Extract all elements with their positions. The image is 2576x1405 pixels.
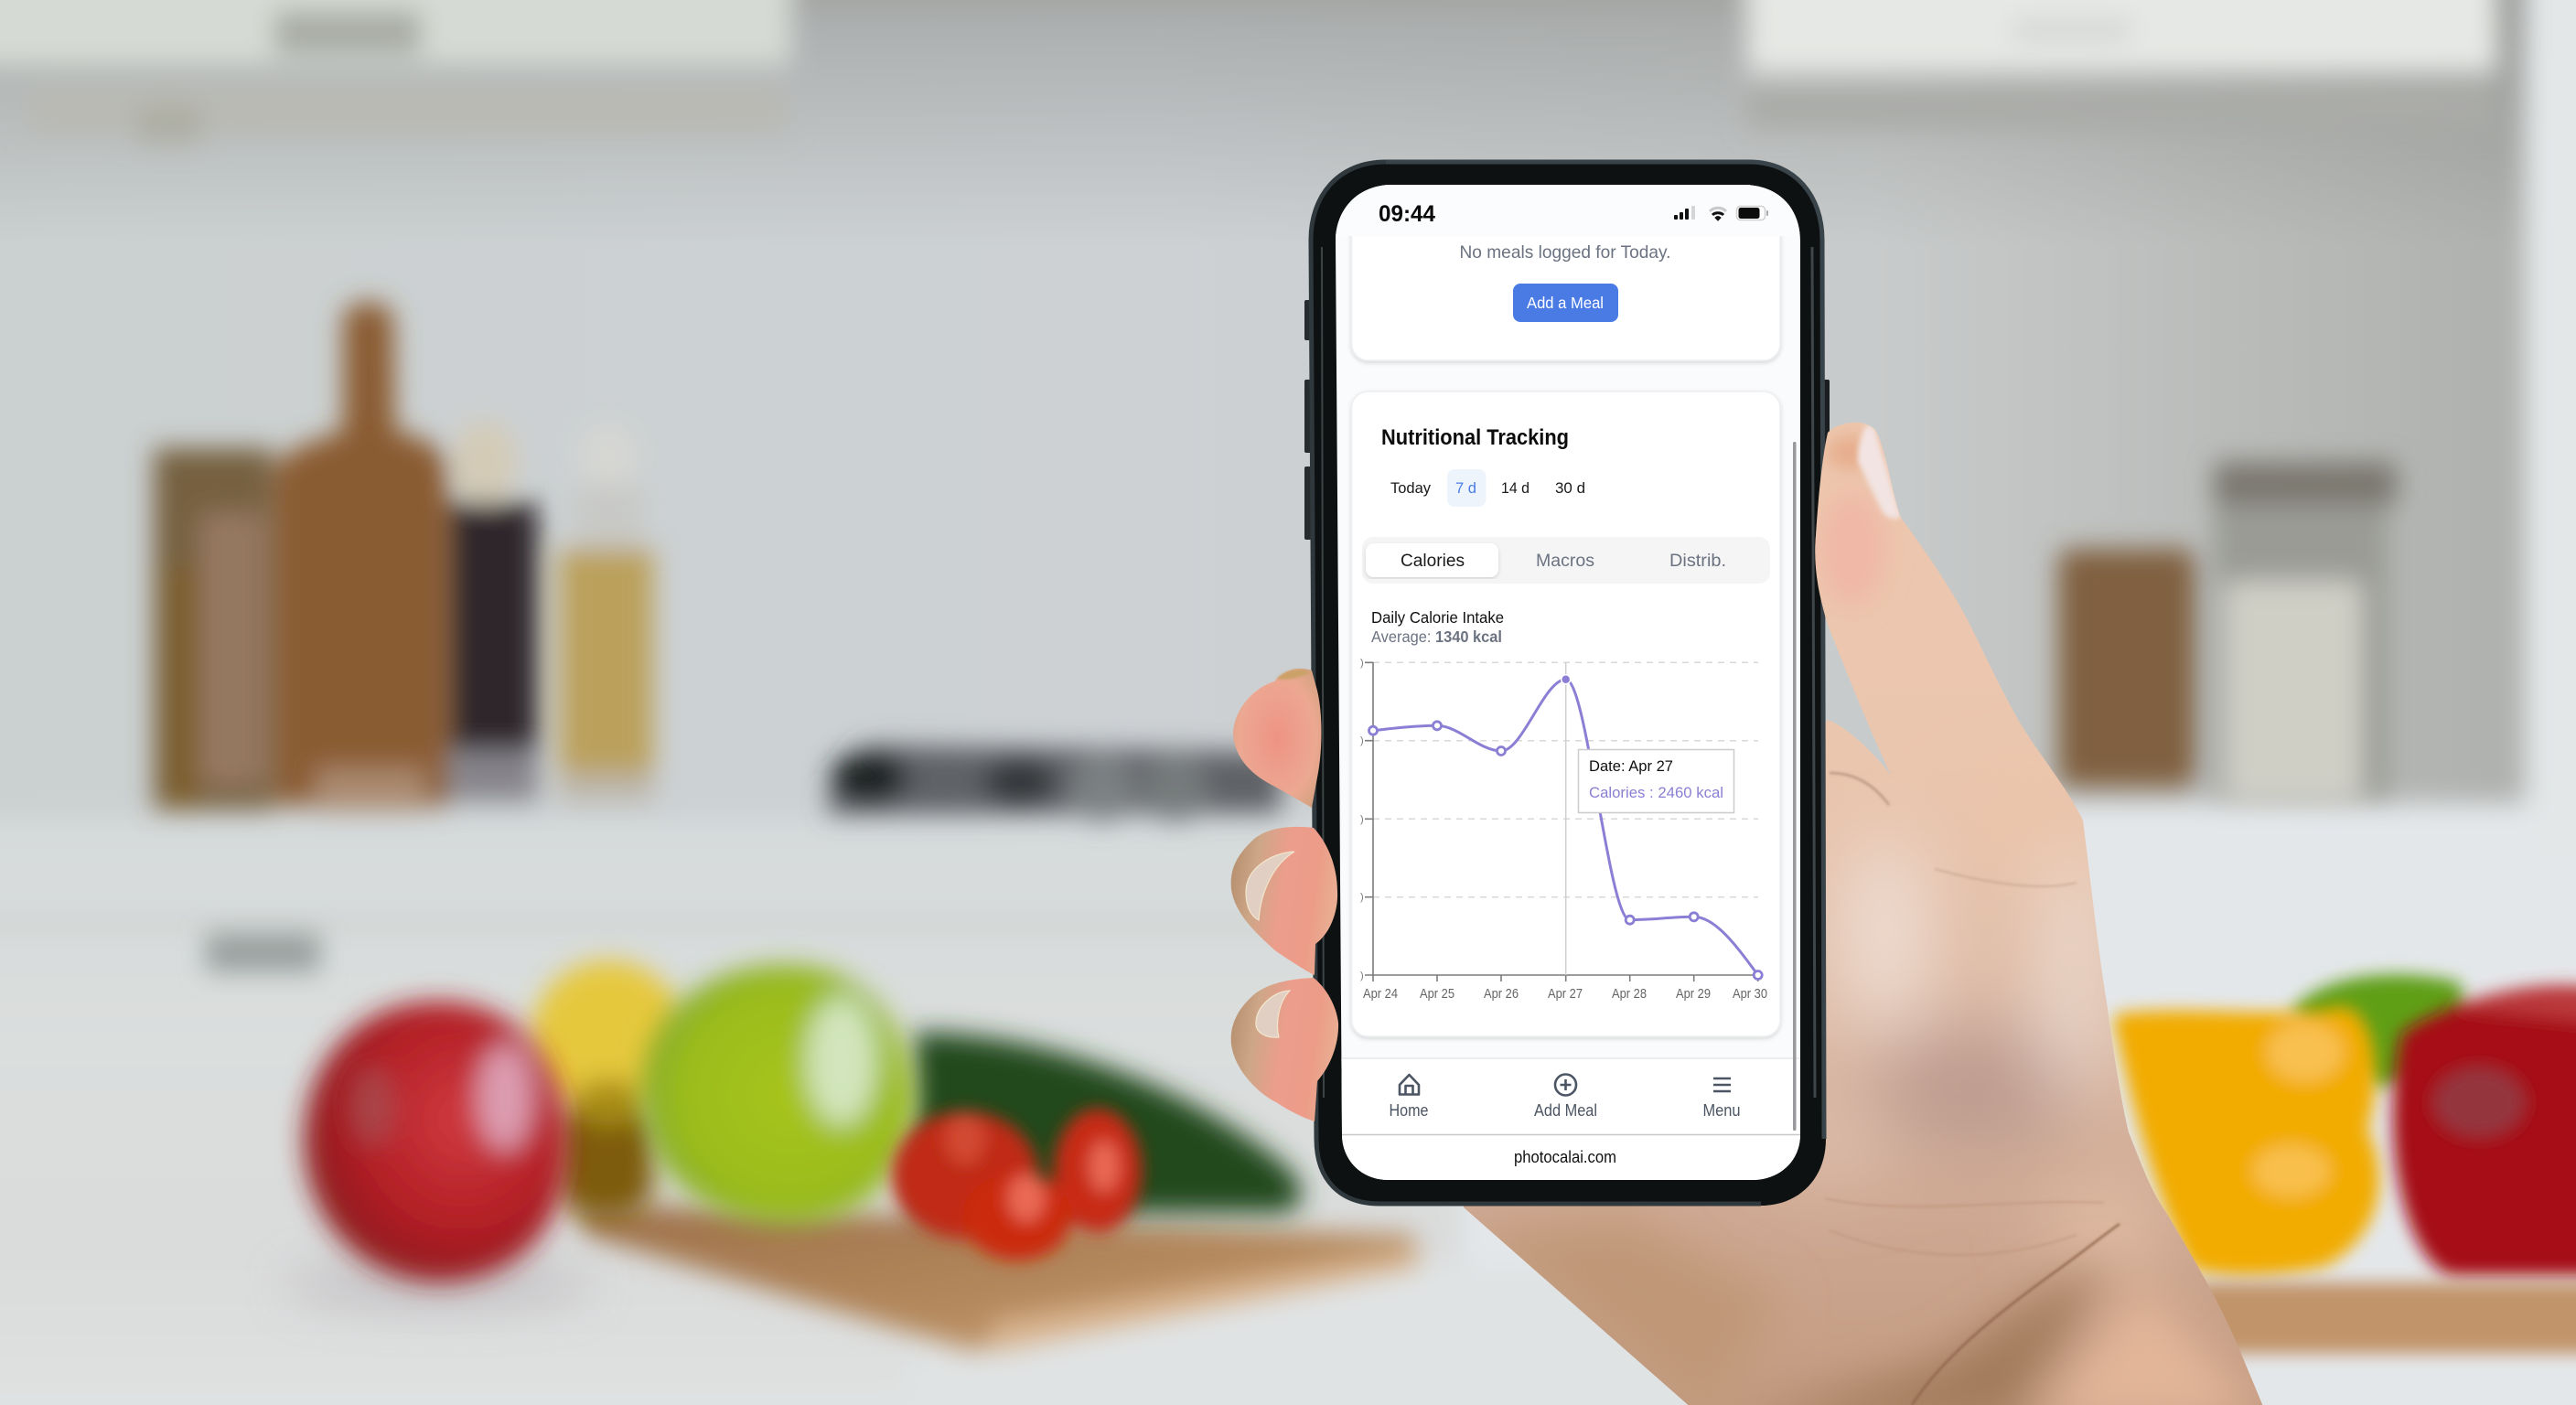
x labels: Apr 25 (1420, 986, 1454, 1002)
button: add a meal: Add a Meal (1527, 294, 1604, 312)
nail (1246, 852, 1294, 920)
segmented control: Distrib. (1669, 552, 1726, 571)
icon: home (1400, 1075, 1419, 1094)
phone body (1304, 160, 1830, 1206)
lemon (531, 960, 686, 1217)
x labels (1363, 986, 1767, 1002)
icon: add (1555, 1074, 1576, 1096)
y labels (1360, 658, 1364, 981)
tomatoes (892, 1109, 1142, 1260)
shade below cabinets (0, 0, 2576, 247)
green apple (642, 965, 913, 1224)
x labels: Apr 24 (1363, 986, 1398, 1002)
url bar: photocalai.com (1514, 1147, 1616, 1166)
thumb pad (1815, 499, 1882, 598)
tooltip: Date: Apr 27 (1589, 757, 1673, 775)
segmented control (1362, 537, 1770, 584)
right shelf items: brown jar and white canister (2058, 462, 2397, 800)
button: add a meal (1513, 284, 1618, 322)
bottom navigation (1331, 1058, 1807, 1135)
status bar (1331, 183, 1807, 236)
middle finger (1231, 827, 1337, 975)
icon: signal (1674, 206, 1695, 220)
y labels: ) (1360, 971, 1364, 981)
card: meals (1352, 165, 1780, 360)
icon: battery (1736, 207, 1768, 220)
y labels: ) (1360, 735, 1364, 746)
empty message: No meals logged for Today. (1460, 242, 1670, 263)
data points (1368, 675, 1762, 979)
segmented control: Macros (1536, 552, 1594, 571)
counter top (0, 803, 2576, 1405)
icon: wifi (1710, 208, 1726, 220)
ring finger (1231, 978, 1338, 1121)
thumb overlapping phone edge (1445, 402, 2287, 1405)
outer frame (1309, 160, 1826, 1206)
card: nutritional tracking (1352, 391, 1780, 1036)
cutting board right (2195, 1282, 2576, 1354)
thumb nail (1858, 424, 1901, 519)
cutting board left (576, 1203, 1418, 1352)
clock: 09:44 (1379, 201, 1435, 227)
frame highlights (1311, 162, 1824, 1204)
shadow under apple (284, 1265, 595, 1305)
x labels: Apr 28 (1612, 986, 1647, 1002)
label: menu: Menu (1703, 1101, 1740, 1120)
segmented control: Calories (1401, 552, 1465, 571)
x labels: Apr 27 (1548, 986, 1583, 1002)
period tabs (1390, 469, 1585, 507)
stove (828, 745, 1281, 821)
left shelf items: jar, cutting board, bottles (154, 302, 653, 810)
small blurred item on counter (206, 933, 320, 971)
phone screen (1331, 165, 1807, 1185)
index finger (1233, 669, 1321, 808)
chart title: Daily Calorie Intake (1371, 608, 1504, 627)
x labels: Apr 30 (1733, 986, 1767, 1002)
cursor line (1565, 662, 1567, 975)
hand: palm, thumb and wrist (1445, 402, 2287, 1405)
cucumber (915, 1032, 1302, 1213)
url bar (1331, 1134, 1807, 1185)
palm creases (1826, 770, 2120, 1405)
red pepper (2393, 985, 2576, 1276)
green pepper (2292, 975, 2470, 1089)
yellow pepper (2113, 1006, 2379, 1275)
x labels: Apr 29 (1676, 986, 1711, 1002)
period tabs: 14 d (1501, 479, 1530, 497)
heading: Nutritional Tracking (1381, 425, 1569, 450)
scrollbar (1793, 442, 1797, 1131)
period tabs: 30 d (1555, 479, 1585, 497)
red apple (304, 1002, 567, 1282)
label: home: Home (1389, 1101, 1429, 1120)
tooltip: Calories : 2460 kcal (1589, 784, 1723, 801)
grid (1373, 662, 1758, 897)
period tabs: 7 d (1455, 479, 1476, 497)
period tabs: Today (1390, 479, 1431, 497)
icon: menu (1713, 1078, 1731, 1091)
chart subtitle: Average: 1340 kcal (1371, 627, 1502, 646)
upper cabinets (0, 0, 2576, 869)
axes (1365, 662, 1758, 981)
line chart (1360, 658, 1767, 1002)
y labels: ) (1360, 814, 1364, 825)
y labels: ) (1360, 892, 1364, 903)
calorie curve (1373, 680, 1758, 975)
side buttons (1304, 300, 1312, 340)
tooltip (1579, 750, 1734, 812)
nail (1256, 991, 1290, 1037)
x labels: Apr 26 (1484, 986, 1519, 1002)
y labels: ) (1360, 658, 1364, 669)
label: add meal: Add Meal (1534, 1101, 1597, 1120)
